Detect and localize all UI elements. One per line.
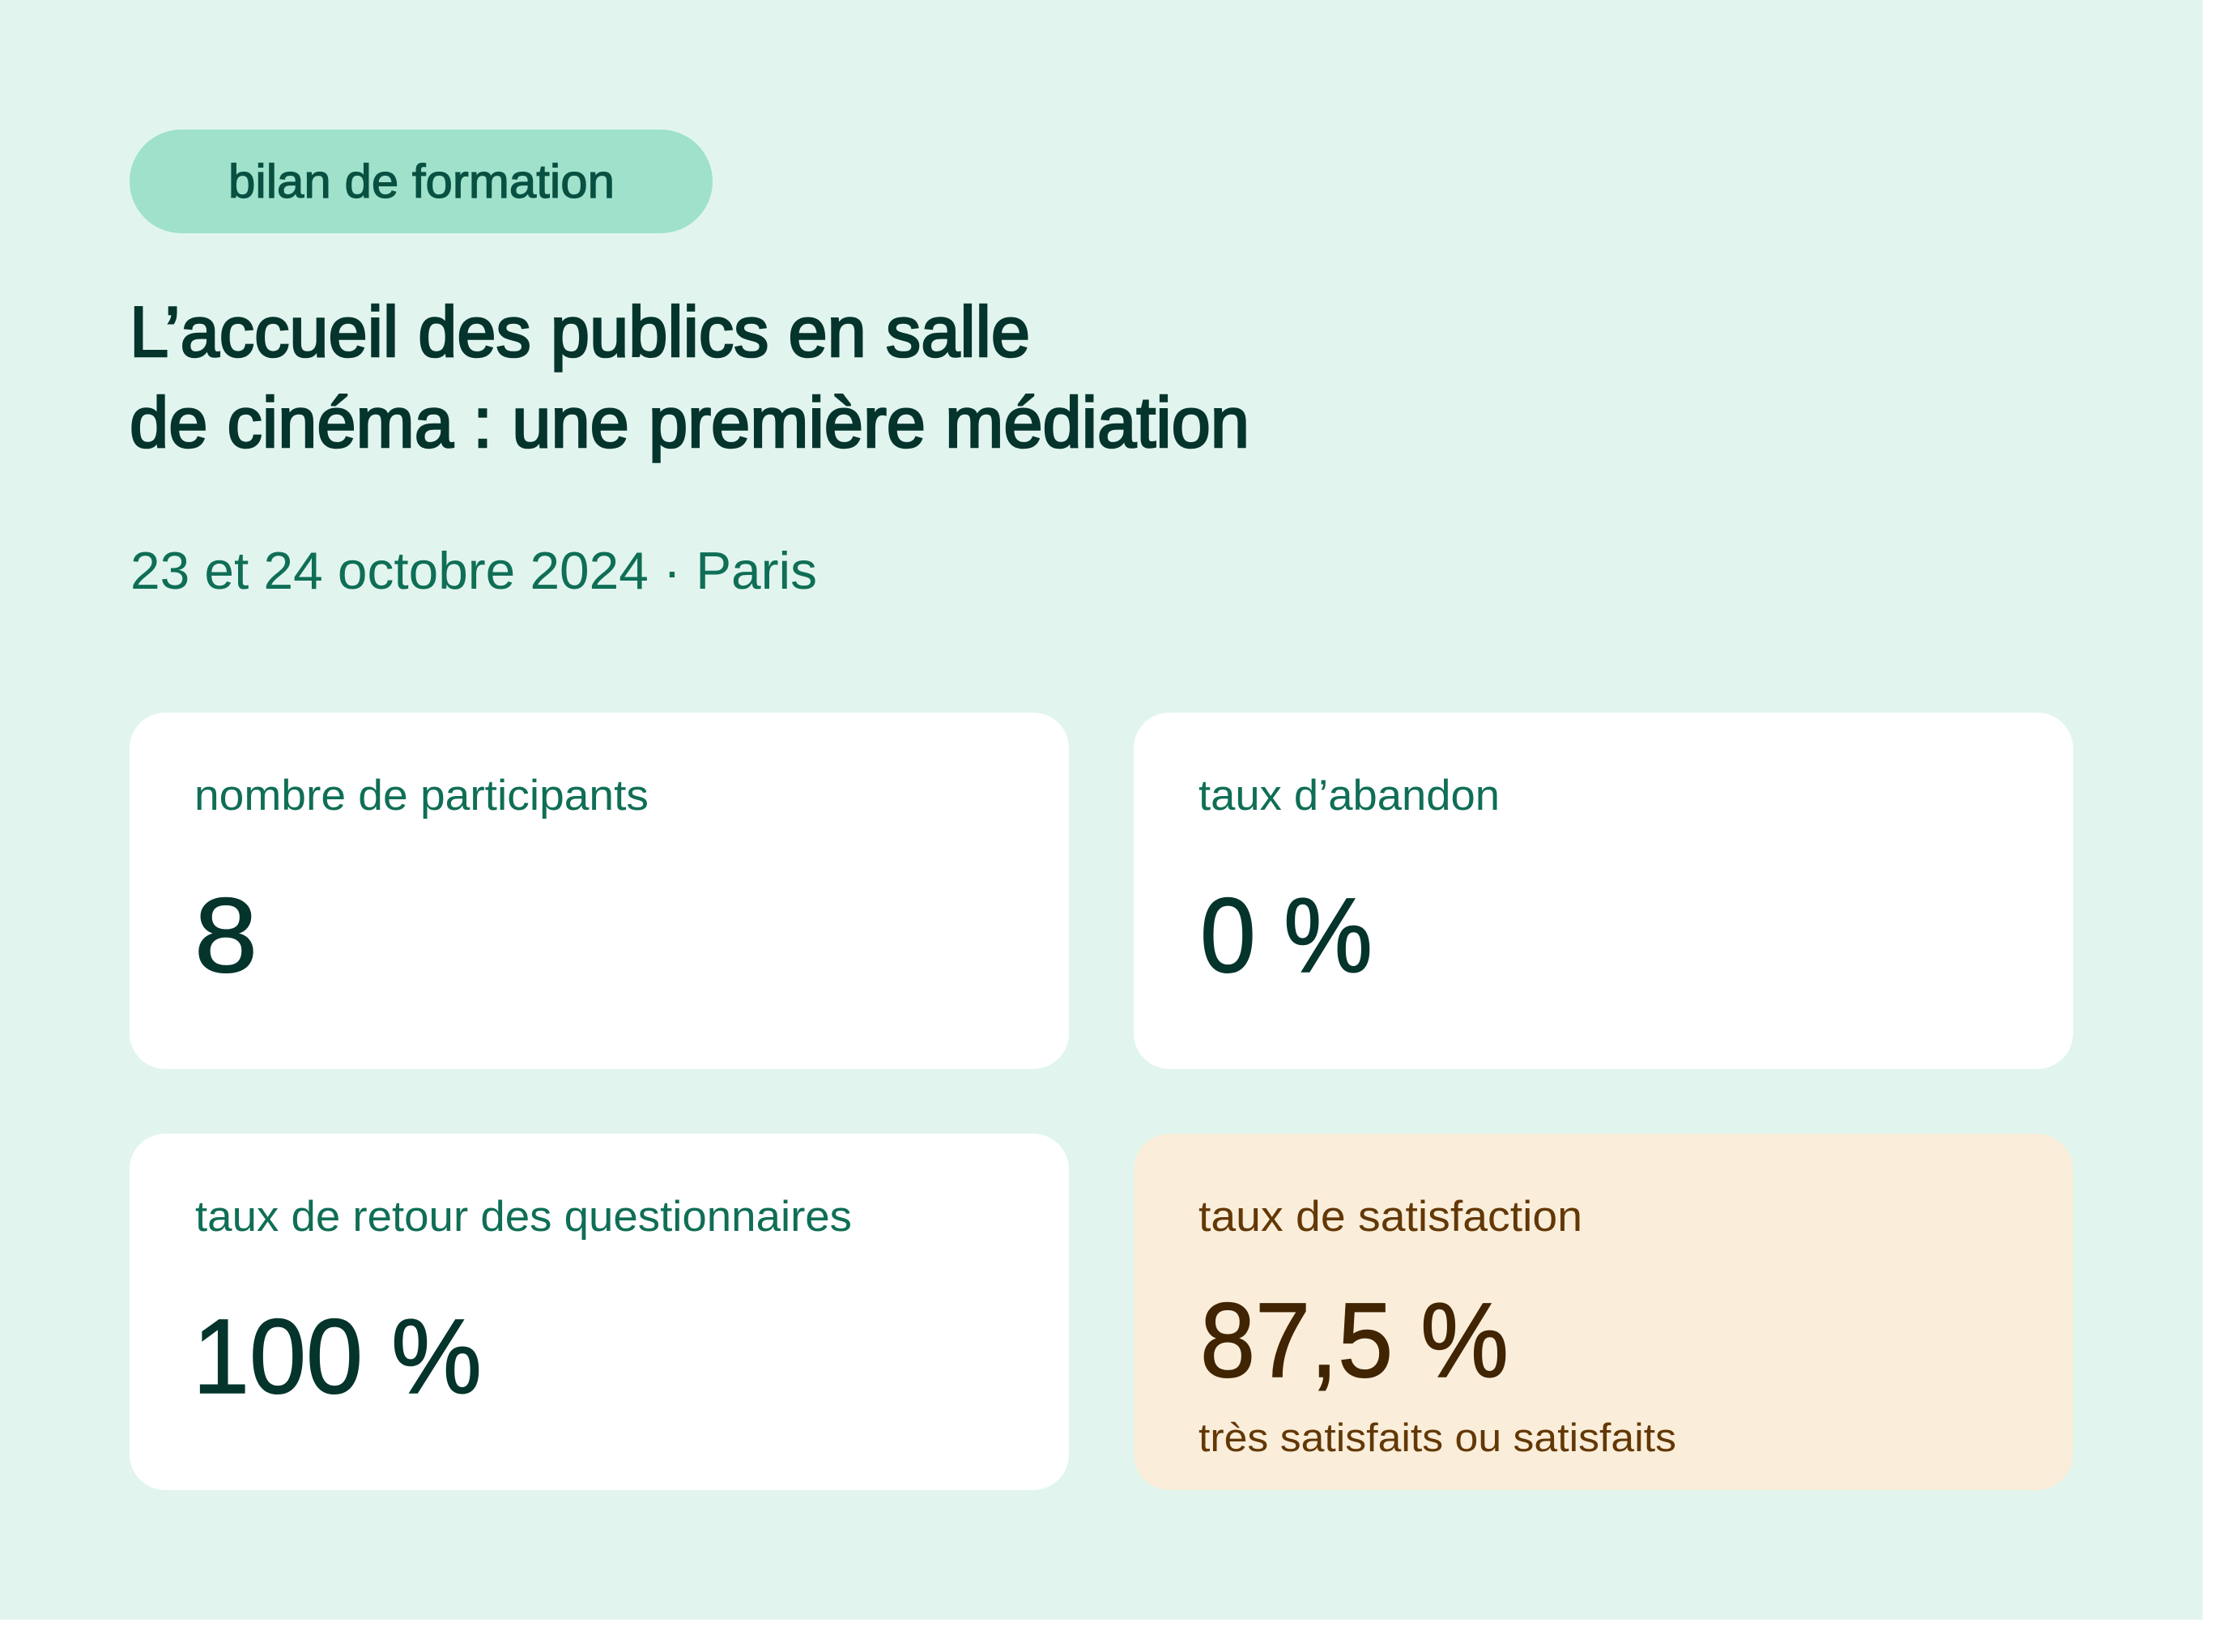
- card: taux de retour des questionnaires: taux de retour des questionnaires: [195, 1193, 852, 1241]
- card: taux d'abandon: 0 %: [1200, 875, 1373, 994]
- card: nombre de participants: 8: [194, 875, 258, 994]
- subtitle: date and place: 23 et 24 octobre 2024 · Paris: [130, 541, 817, 600]
- card: taux de satisfaction: taux de satisfaction: [1198, 1193, 1582, 1241]
- card: nombre de participants: nombre de participants: [194, 772, 649, 820]
- card: taux de satisfaction: [1134, 1134, 2073, 1490]
- card: taux de satisfaction: très satisfaits ou satisfaits: [1198, 1416, 1676, 1460]
- card: taux de retour des questionnaires: [130, 1134, 1069, 1490]
- card: taux d'abandon: taux d’abandon: [1198, 772, 1500, 820]
- card: taux de retour des questionnaires: 100 %: [193, 1296, 482, 1416]
- card: nombre de participants: [130, 713, 1069, 1069]
- title: [130, 292, 1249, 462]
- badge: bilan de formation: [130, 130, 713, 233]
- card: taux de satisfaction: 87,5 %: [1200, 1280, 1509, 1399]
- badge: bilan de formation: bilan de formation: [228, 155, 615, 208]
- title: L’accueil des publics en salle: [130, 292, 1030, 372]
- title: de cinéma : une première médiation: [130, 382, 1249, 462]
- card: taux d'abandon: [1134, 713, 2073, 1069]
